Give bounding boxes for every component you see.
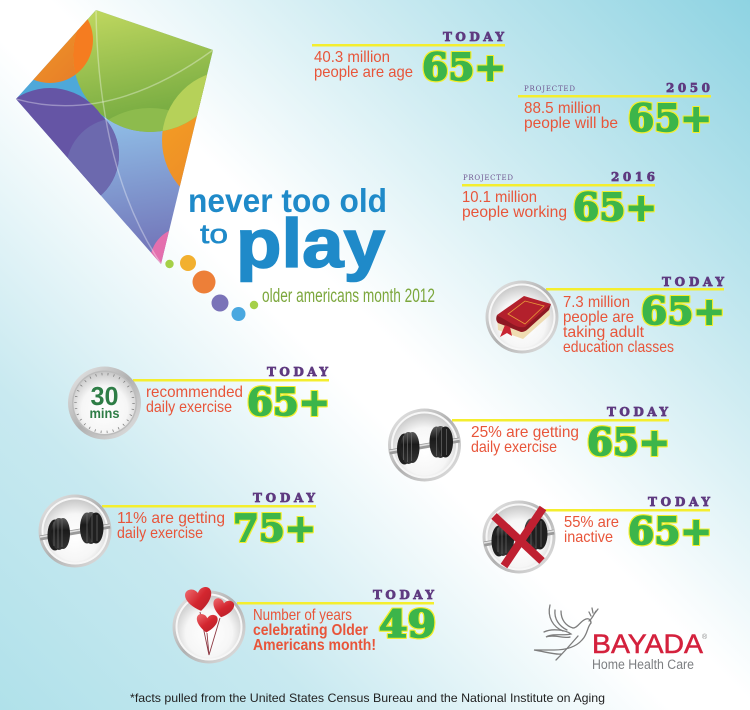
icon: book [486,280,558,354]
icon: crossed out dumbbell [482,500,556,574]
stat: 40.3 million today: 40.3 million [314,49,390,66]
logo: Bayada [534,605,708,672]
stat: 49 years [237,588,436,654]
stat: 25 percent: TODAY [607,405,668,419]
logo: Bayada: ® [702,633,708,641]
stat: 40.3 million today [312,30,506,89]
stat: 40.3 million today: 65+ [422,45,506,89]
stat: 49 years: celebrating Older [253,622,368,639]
stat: adult education: TODAY [662,275,724,289]
stat: recommended exercise: 65+ [247,380,330,424]
stat: 49 years: 49 [379,602,436,646]
stat: 11 percent: 11% are getting [117,510,225,527]
icon: dove [534,605,598,660]
stat: 11 percent: TODAY [253,491,315,505]
stat: 55 percent inactive: inactive [564,529,613,546]
stat: recommended exercise [133,365,330,424]
title: play [236,205,385,282]
icon: dumbbell [388,408,461,482]
kite tail dots [165,255,258,321]
stat: 88.5 million 2050 [518,81,712,140]
title: never too old [188,182,387,219]
stat: 11 percent: daily exercise [117,525,203,542]
stat: 55 percent inactive: 55% are [564,514,619,531]
stat: 88.5 million 2050: people will be [524,115,618,132]
stat: 49 years: Number of years [253,607,352,624]
stat: 55 percent inactive [540,495,712,553]
stat: 10.1 million working 2016: 65+ [573,185,657,229]
stat: 40.3 million today: TODAY [443,30,504,44]
stat: 10.1 million working 2016: people working [462,204,567,221]
title [188,182,387,282]
stat: 55 percent inactive: TODAY [648,495,710,509]
stat: 25 percent [452,405,670,464]
stat: adult education: 7.3 million [563,294,630,311]
logo: Bayada: Home Health Care [592,657,694,672]
icon: dumbbell [38,494,112,568]
icon: 30 minute clock [68,366,141,440]
stat: 88.5 million 2050: 88.5 million [524,100,601,117]
stat: adult education: people are [563,309,634,326]
kite [16,10,213,264]
stat: 10.1 million working 2016 [462,170,657,229]
title: to [200,219,228,249]
stat: 11 percent [102,491,316,550]
stat: 88.5 million 2050: 65+ [628,96,712,140]
stat: 25 percent: daily exercise [471,439,557,456]
stat: 10.1 million working 2016: PROJECTED [463,174,513,182]
icon: heart balloons [172,586,246,664]
stat: 25 percent: 25% are getting [471,424,579,441]
icon: 30 minute clock: mins [90,405,120,421]
stat: 11 percent: 75+ [233,506,316,550]
icon: 30 minute clock: 30 [90,381,118,411]
stat: 10.1 million working 2016: 10.1 million [462,189,537,206]
stat: adult education [546,275,725,356]
stat: recommended exercise: TODAY [267,365,328,379]
stat: 10.1 million working 2016: 2016 [611,170,655,184]
stat: 88.5 million 2050: PROJECTED [524,85,575,93]
stat: adult education: education classes [563,339,674,356]
stat: 40.3 million today: people are age [314,64,413,81]
footnote: *facts pulled from the United States Census Bureau and the National Institute on Aging [130,691,605,705]
stat: 49 years: Americans month! [253,637,376,654]
stat: 49 years: TODAY [373,588,434,602]
stat: recommended exercise: daily exercise [146,399,232,416]
stat: recommended exercise: recommended [146,384,243,401]
subtitle: older americans month 2012 [262,286,435,307]
stat: 88.5 million 2050: 2050 [666,81,710,95]
stat: 55 percent inactive: 65+ [628,509,712,553]
stat: adult education: taking adult [563,324,645,341]
logo: Bayada: BAYADA [592,629,703,659]
stat: adult education: 65+ [641,289,725,333]
stat: 25 percent: 65+ [587,420,670,464]
